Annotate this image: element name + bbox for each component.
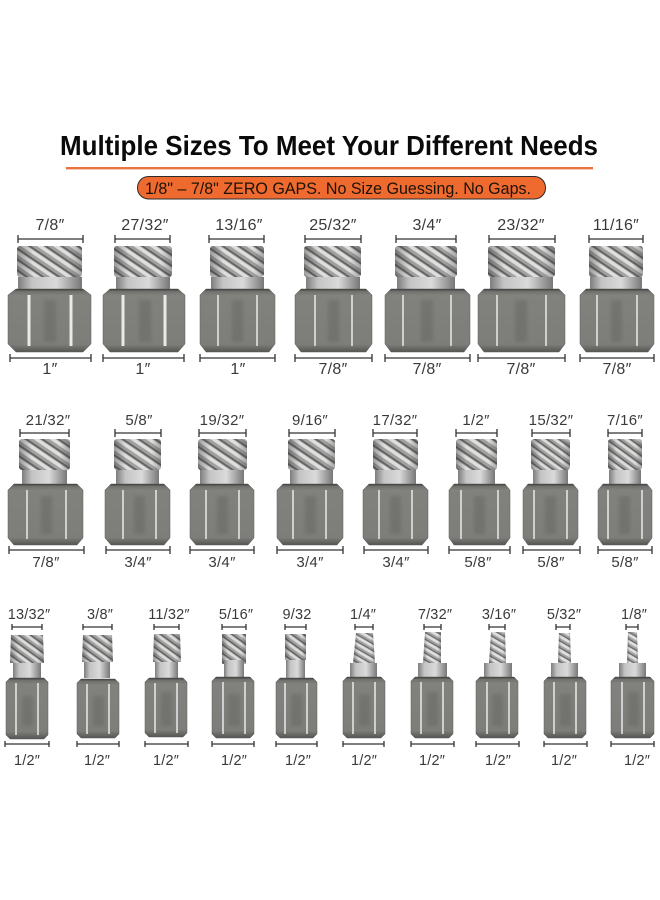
bottom size label: 1/2″ [351, 753, 377, 769]
fluted head [198, 439, 247, 470]
bit 15/32 [523, 412, 580, 571]
top size label: 5/8″ [125, 412, 153, 429]
bottom dimension bracket [523, 546, 580, 554]
hex shank [476, 677, 518, 738]
fluted head [10, 635, 44, 663]
collar [155, 662, 178, 678]
top dimension bracket [489, 235, 555, 243]
bottom size label: 3/4″ [208, 554, 236, 571]
bottom size label: 7/8″ [602, 361, 632, 378]
collar [200, 470, 244, 484]
hex shank [580, 289, 654, 352]
bit 3/16 [476, 607, 519, 769]
collar [350, 663, 377, 677]
top dimension bracket [20, 429, 69, 437]
bit 17/32 [363, 412, 428, 571]
collar [458, 470, 495, 484]
collar [290, 470, 333, 484]
bottom dimension bracket [295, 354, 372, 362]
top size label: 13/16″ [215, 217, 263, 234]
hex shank [190, 484, 254, 545]
bottom size label: 1″ [230, 361, 246, 378]
hex shank [385, 289, 470, 352]
bit 27/32 [103, 217, 185, 378]
bottom size label: 3/4″ [382, 554, 410, 571]
top dimension bracket [626, 624, 638, 630]
bottom dimension bracket [5, 741, 49, 747]
top size label: 11/32″ [148, 607, 190, 623]
subtitle pill: 1/8" – 7/8" ZERO GAPS. No Size Guessing. No Gaps. [145, 179, 531, 198]
bit 11/16 [580, 217, 654, 378]
bit 21/32 [8, 412, 84, 571]
bottom dimension bracket [449, 546, 510, 554]
shank neck [286, 660, 305, 678]
top dimension bracket [115, 235, 170, 243]
bit 13/32 [5, 607, 50, 769]
fluted head [423, 632, 441, 663]
bottom size label: 7/8″ [506, 361, 536, 378]
fluted head [17, 246, 82, 277]
fluted head [373, 439, 418, 470]
fluted head [589, 246, 643, 277]
top dimension bracket [199, 429, 246, 437]
bit 1/4 [343, 607, 385, 769]
bottom dimension bracket [190, 546, 254, 554]
bit 5/32 [544, 607, 587, 769]
top dimension bracket [456, 429, 497, 437]
bottom size label: 1/2″ [624, 753, 650, 769]
collar [116, 277, 170, 290]
top dimension bracket [489, 624, 505, 630]
top size label: 9/32 [282, 607, 312, 623]
bottom dimension bracket [385, 354, 470, 362]
bottom size label: 5/8″ [611, 554, 639, 571]
fluted head [558, 633, 571, 663]
bottom size label: 7/8″ [318, 361, 348, 378]
collar [84, 662, 110, 678]
fluted head [114, 439, 161, 470]
bottom size label: 1/2″ [419, 753, 445, 769]
bottom dimension bracket [478, 354, 565, 362]
top size label: 1/2″ [462, 412, 490, 429]
bottom dimension bracket [145, 741, 188, 747]
top size label: 21/32″ [26, 412, 71, 429]
bottom dimension bracket [411, 741, 454, 747]
collar [375, 470, 416, 484]
top size label: 13/32″ [8, 607, 50, 623]
bottom dimension bracket [276, 741, 317, 747]
collar [397, 277, 455, 290]
top size label: 7/8″ [35, 217, 65, 234]
row 3 bits [5, 607, 654, 769]
bottom dimension bracket [277, 546, 343, 554]
bottom size label: 1″ [135, 361, 151, 378]
top dimension bracket [589, 235, 643, 243]
fluted head [395, 246, 457, 277]
top dimension bracket [222, 624, 246, 630]
bottom dimension bracket [10, 354, 91, 362]
fluted head [488, 246, 555, 277]
bottom dimension bracket [212, 741, 254, 747]
hex shank [103, 289, 185, 352]
top size label: 3/4″ [412, 217, 442, 234]
fluted head [353, 633, 375, 663]
bit 5/8 [105, 412, 170, 571]
bottom size label: 3/4″ [124, 554, 152, 571]
hex shank [200, 289, 275, 352]
row 2 bits [8, 412, 652, 571]
bottom size label: 1/2″ [14, 753, 40, 769]
fluted head [456, 439, 497, 470]
fluted head [608, 439, 642, 470]
top size label: 27/32″ [121, 217, 169, 234]
top size label: 25/32″ [309, 217, 357, 234]
top dimension bracket [355, 624, 373, 630]
collar [484, 663, 512, 677]
bottom size label: 5/8″ [537, 554, 565, 571]
bit 7/8 [8, 217, 91, 378]
bottom dimension bracket [77, 741, 119, 747]
collar [533, 470, 568, 484]
top size label: 1/8″ [621, 607, 647, 623]
top size label: 7/16″ [607, 412, 643, 429]
top dimension bracket [556, 624, 570, 630]
fluted head [531, 439, 570, 470]
top size label: 5/32″ [547, 607, 581, 623]
bottom dimension bracket [544, 741, 587, 747]
hex shank [6, 678, 48, 739]
bottom size label: 7/8″ [412, 361, 442, 378]
collar [22, 470, 67, 484]
collar [211, 277, 264, 290]
row 1 bits [8, 217, 654, 378]
bottom size label: 1/2″ [551, 753, 577, 769]
bottom size label: 7/8″ [32, 554, 60, 571]
bottom size label: 1/2″ [84, 753, 110, 769]
top dimension bracket [373, 429, 417, 437]
top dimension bracket [532, 429, 570, 437]
hex shank [8, 484, 83, 545]
hex shank [8, 289, 91, 352]
fluted head [153, 634, 181, 662]
top size label: 15/32″ [529, 412, 574, 429]
bit 7/16 [598, 412, 652, 571]
bottom dimension bracket [598, 546, 652, 554]
top size label: 7/32″ [418, 607, 452, 623]
hex shank [478, 289, 565, 352]
top size label: 1/4″ [350, 607, 376, 623]
bottom size label: 1″ [42, 361, 58, 378]
orange title underline [66, 167, 593, 169]
bit 3/8 [77, 607, 119, 769]
top dimension bracket [18, 235, 83, 243]
title: Multiple Sizes To Meet Your Different Needs [60, 130, 598, 161]
collar [116, 470, 159, 484]
bottom dimension bracket [343, 741, 384, 747]
hex shank [145, 678, 187, 737]
top size label: 3/16″ [482, 607, 516, 623]
bottom dimension bracket [103, 354, 184, 362]
collar [551, 663, 578, 677]
hex shank [295, 289, 372, 352]
bit 9/32 [276, 607, 317, 769]
collar [619, 663, 646, 677]
top dimension bracket [115, 429, 161, 437]
bottom dimension bracket [106, 546, 170, 554]
hex shank [411, 677, 453, 738]
bottom size label: 1/2″ [221, 753, 247, 769]
fluted head [627, 632, 638, 663]
hex shank [544, 677, 586, 738]
bottom dimension bracket [9, 546, 84, 554]
fluted head [222, 634, 246, 664]
hex shank [276, 678, 317, 738]
fluted head [304, 246, 361, 277]
hex shank [212, 677, 254, 738]
shank neck [224, 660, 244, 677]
bottom dimension bracket [476, 741, 519, 747]
top size label: 5/16″ [219, 607, 253, 623]
collar [418, 663, 447, 677]
top dimension bracket [424, 624, 441, 630]
top size label: 11/16″ [593, 217, 639, 234]
top dimension bracket [209, 235, 264, 243]
bit 9/16 [277, 412, 343, 571]
bottom dimension bracket [200, 354, 275, 362]
fluted head [210, 246, 264, 277]
collar [13, 663, 41, 678]
top dimension bracket [83, 624, 112, 630]
collar [306, 277, 360, 290]
top dimension bracket [396, 235, 456, 243]
hex shank [77, 679, 119, 738]
bottom size label: 1/2″ [153, 753, 179, 769]
fluted head [288, 439, 335, 470]
hex shank [523, 484, 578, 545]
bit 1/8 [611, 607, 654, 769]
top dimension bracket [305, 235, 361, 243]
hex shank [363, 484, 428, 545]
top size label: 19/32″ [200, 412, 245, 429]
top dimension bracket [608, 429, 642, 437]
hex shank [449, 484, 510, 545]
fluted head [285, 634, 306, 660]
bottom size label: 3/4″ [296, 554, 324, 571]
collar [590, 277, 642, 290]
bit 7/32 [411, 607, 454, 769]
bit 19/32 [190, 412, 254, 571]
collar [609, 470, 641, 484]
top size label: 17/32″ [373, 412, 418, 429]
top dimension bracket [285, 624, 306, 630]
hex shank [277, 484, 343, 545]
bit 13/16 [200, 217, 275, 378]
fluted head [82, 635, 113, 662]
collar [18, 277, 82, 290]
fluted head [114, 246, 172, 277]
fluted head [19, 439, 70, 470]
top dimension bracket [12, 624, 42, 630]
bit 23/32 [478, 217, 565, 378]
top dimension bracket [289, 429, 335, 437]
hex shank [343, 677, 385, 738]
bit 11/32 [145, 607, 190, 769]
bit 5/16 [212, 607, 254, 769]
top size label: 9/16″ [292, 412, 328, 429]
bit 1/2 [449, 412, 510, 571]
fluted head [489, 632, 506, 663]
bottom size label: 1/2″ [285, 753, 311, 769]
bottom dimension bracket [611, 741, 654, 747]
bottom dimension bracket [364, 546, 428, 554]
top size label: 3/8″ [87, 607, 113, 623]
collar [490, 277, 553, 290]
bit 3/4 [385, 217, 470, 378]
hex shank [611, 677, 654, 738]
bottom dimension bracket [580, 354, 654, 362]
bottom size label: 1/2″ [485, 753, 511, 769]
top size label: 23/32″ [497, 217, 545, 234]
bottom size label: 5/8″ [464, 554, 492, 571]
hex shank [598, 484, 652, 545]
bit 25/32 [295, 217, 372, 378]
top dimension bracket [154, 624, 179, 630]
hex shank [105, 484, 170, 545]
